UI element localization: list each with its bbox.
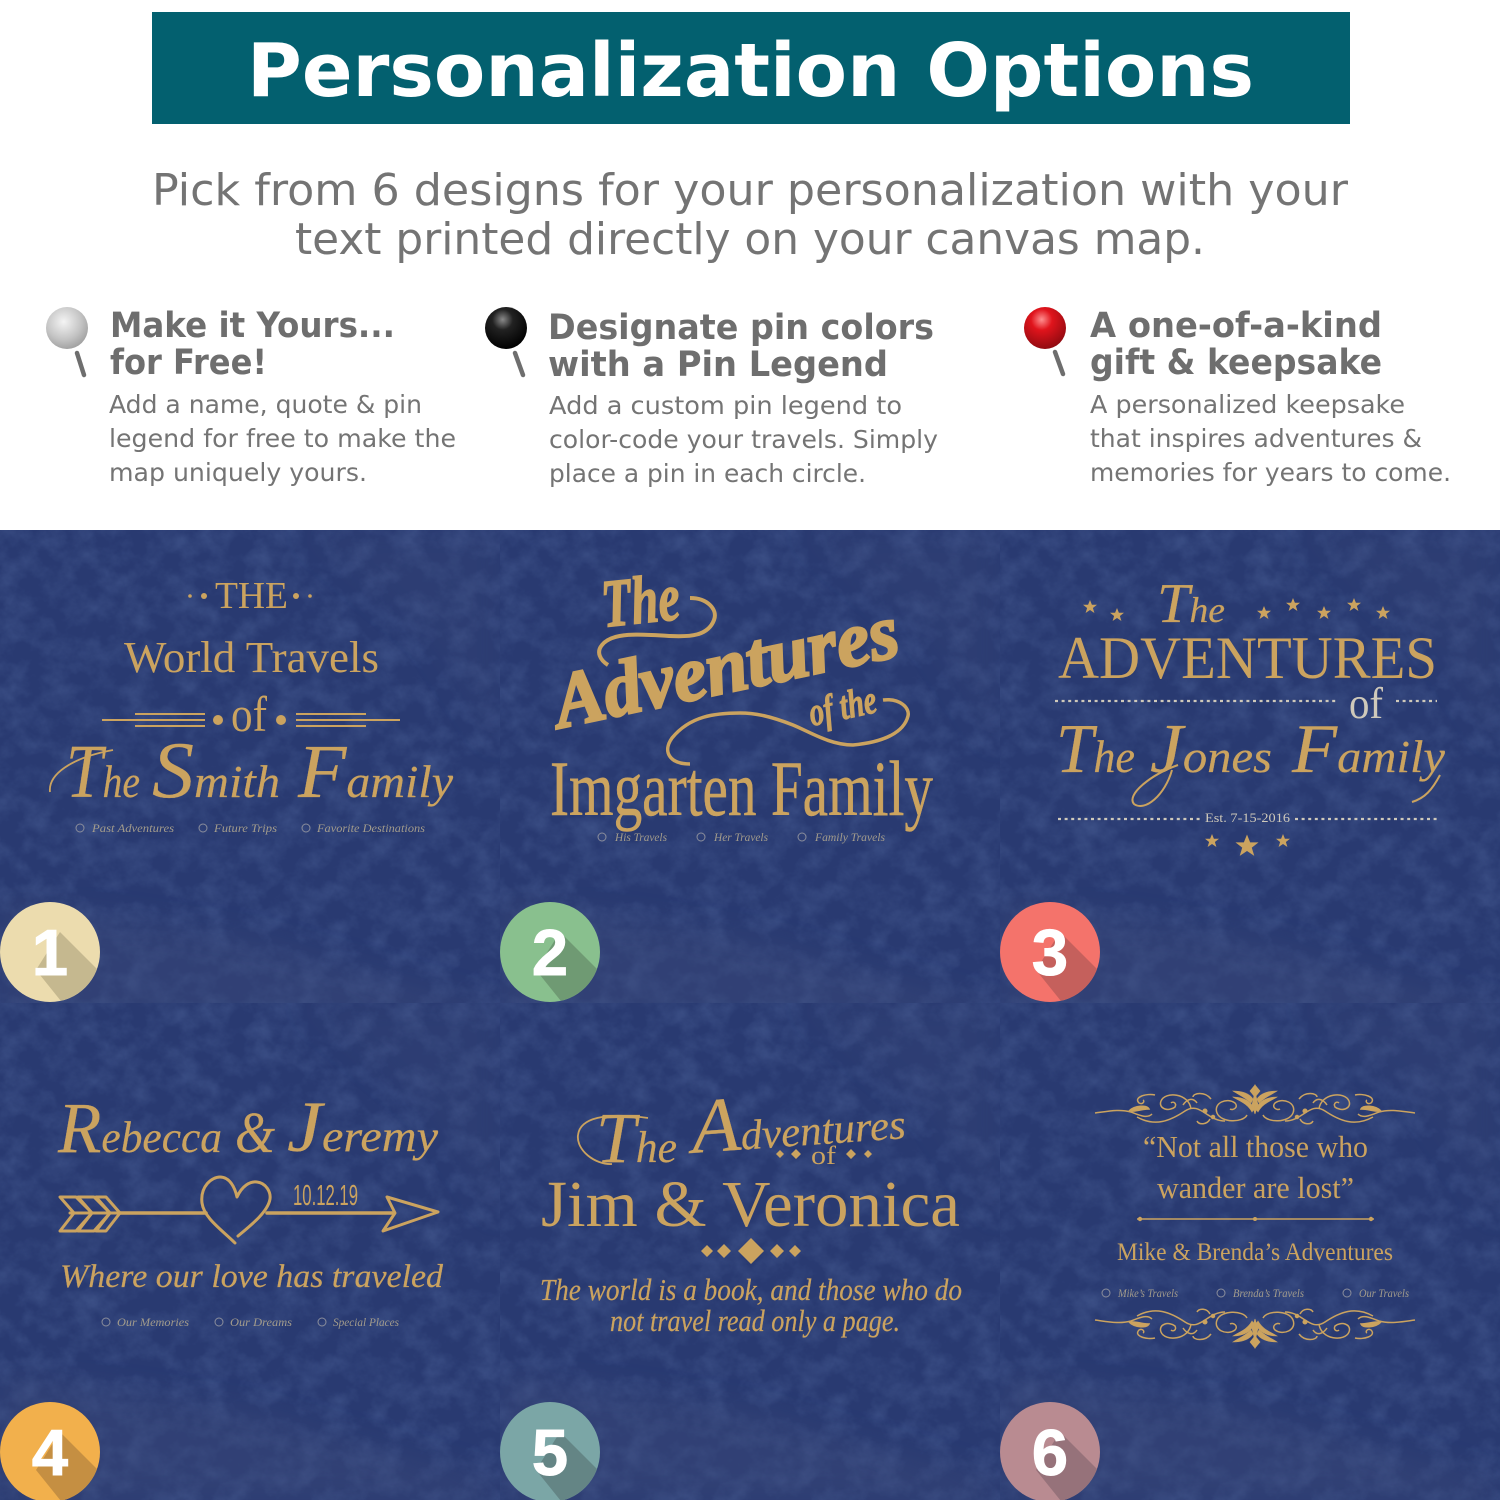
- subtitle: Mike & Brenda’s Adventures: [1117, 1239, 1393, 1266]
- title text: [57, 1087, 444, 1295]
- title text: The: [1056, 711, 1135, 788]
- intro text: Pick from 6 designs for your personalization with your: [152, 165, 1349, 216]
- body text: A personalized keepsake: [1090, 390, 1405, 419]
- pin legend: Family Travels: [814, 830, 885, 844]
- pin legend: [1102, 1286, 1409, 1300]
- pin legend: [76, 821, 425, 835]
- pin legend: His Travels: [614, 830, 667, 844]
- title text: [541, 558, 933, 832]
- pin legend: Past Adventures: [91, 821, 174, 835]
- number badge 2: [500, 902, 600, 1002]
- title text: Adventures: [541, 587, 906, 746]
- title text: World Travels: [124, 633, 379, 682]
- title text: Imgarten Family: [550, 745, 933, 832]
- heading: with a Pin Legend: [548, 345, 888, 385]
- icon: black pin: [485, 307, 527, 375]
- body text: legend for free to make the: [109, 424, 456, 453]
- title text: [1055, 573, 1446, 825]
- body text: Add a custom pin legend to: [549, 391, 902, 420]
- pin legend: Brenda’s Travels: [1233, 1286, 1304, 1300]
- title text: The: [1157, 573, 1225, 635]
- panel: design 4: [0, 1003, 500, 1500]
- stars: [1083, 598, 1390, 856]
- feature: pin legend: [485, 307, 938, 488]
- heading: Designate pin colors: [548, 308, 934, 348]
- panel: design 1: [0, 530, 500, 1003]
- title text: of: [811, 1141, 836, 1170]
- icon: arrow with heart: [60, 1177, 438, 1243]
- quote: not travel read only a page.: [610, 1303, 900, 1338]
- number badge 5: 5: [532, 1416, 568, 1489]
- title text: Adventures: [683, 1068, 908, 1170]
- pin legend: Our Travels: [1359, 1286, 1409, 1300]
- pin legend: Favorite Destinations: [316, 821, 425, 835]
- title text: Family: [297, 730, 454, 814]
- diamonds: [701, 1238, 801, 1264]
- title text: Jim & Veronica: [541, 1168, 960, 1241]
- pin legend: Mike’s Travels: [1117, 1286, 1178, 1300]
- title text: Est. 7-15-2016: [1205, 810, 1291, 825]
- title text: of the: [805, 677, 880, 735]
- body text: Add a name, quote & pin: [109, 390, 422, 419]
- number badge 4: [0, 1402, 100, 1500]
- title text: 10.12.19: [293, 1180, 358, 1212]
- body text: place a pin in each circle.: [549, 459, 866, 488]
- title text: of: [1349, 679, 1383, 728]
- heading: [1090, 306, 1382, 383]
- pin legend: [102, 1315, 399, 1329]
- panel: design 5: [500, 1003, 1000, 1500]
- number badge 6: 6: [1032, 1416, 1068, 1489]
- number badge 3: 3: [1032, 916, 1068, 989]
- body text: that inspires adventures &: [1090, 424, 1422, 453]
- bottom flourish: [1095, 1309, 1415, 1348]
- icon: red pin: [1024, 307, 1066, 374]
- pin legend: Our Dreams: [230, 1315, 292, 1329]
- title text: Where our love has traveled: [60, 1259, 444, 1295]
- title text: Smith: [152, 727, 280, 815]
- title banner: [152, 12, 1350, 124]
- title text: [50, 575, 454, 815]
- number badge 1: 1: [32, 916, 68, 989]
- quote: [1143, 1129, 1368, 1205]
- body text: [549, 391, 938, 488]
- icon: silver pin: [46, 307, 88, 375]
- number badge 3: [1000, 902, 1100, 1002]
- feature: keepsake: [1024, 306, 1451, 487]
- heading: gift & keepsake: [1090, 343, 1382, 383]
- title text: ADVENTURES: [1058, 625, 1437, 691]
- title text: Family: [1291, 711, 1446, 788]
- number badge 2: 2: [532, 916, 568, 989]
- title text: THE: [215, 575, 288, 617]
- number badge 1: [0, 902, 100, 1002]
- heading: Make it Yours...: [110, 306, 395, 346]
- title text: The: [598, 558, 683, 642]
- title text: The: [596, 1098, 677, 1178]
- heading: A one-of-a-kind: [1090, 306, 1382, 346]
- pin legend: Special Places: [333, 1315, 399, 1329]
- pin legend: Future Trips: [213, 821, 277, 835]
- intro text: text printed directly on your canvas map.: [295, 214, 1205, 265]
- body text: color-code your travels. Simply: [549, 425, 938, 454]
- body text: [109, 390, 456, 487]
- number badge 5: [500, 1402, 600, 1500]
- title text: Jones: [1150, 711, 1272, 788]
- title text: of: [231, 686, 267, 742]
- quote: The world is a book, and those who do: [540, 1272, 962, 1307]
- body text: memories for years to come.: [1090, 458, 1451, 487]
- title: Personalization Options: [247, 28, 1254, 114]
- quote: “Not all those who: [1143, 1129, 1368, 1164]
- title text: [541, 1068, 960, 1241]
- title text: Rebecca: [57, 1088, 222, 1168]
- quote: [540, 1272, 962, 1338]
- title text: The: [66, 730, 140, 814]
- heading: for Free!: [110, 343, 267, 383]
- top flourish: [1095, 1085, 1415, 1124]
- divider: [1137, 1217, 1374, 1221]
- quote: wander are lost”: [1157, 1170, 1354, 1205]
- panel: design 3: [1000, 530, 1500, 1003]
- body text: [1090, 390, 1451, 487]
- feature: make it yours: [46, 306, 456, 487]
- body text: map uniquely yours.: [109, 458, 367, 487]
- number badge 6: [1000, 1402, 1100, 1500]
- panel: design 2: [500, 530, 1000, 1003]
- intro text: [152, 165, 1349, 265]
- title text: &: [235, 1100, 275, 1165]
- title text: Jeremy: [287, 1087, 439, 1167]
- panel: design 6: [1000, 1003, 1500, 1500]
- number badge 4: 4: [32, 1416, 68, 1489]
- heading: [110, 306, 395, 383]
- pin legend: Our Memories: [117, 1315, 189, 1329]
- pin legend: [598, 830, 885, 844]
- heading: [548, 308, 934, 385]
- pin legend: Her Travels: [713, 830, 768, 844]
